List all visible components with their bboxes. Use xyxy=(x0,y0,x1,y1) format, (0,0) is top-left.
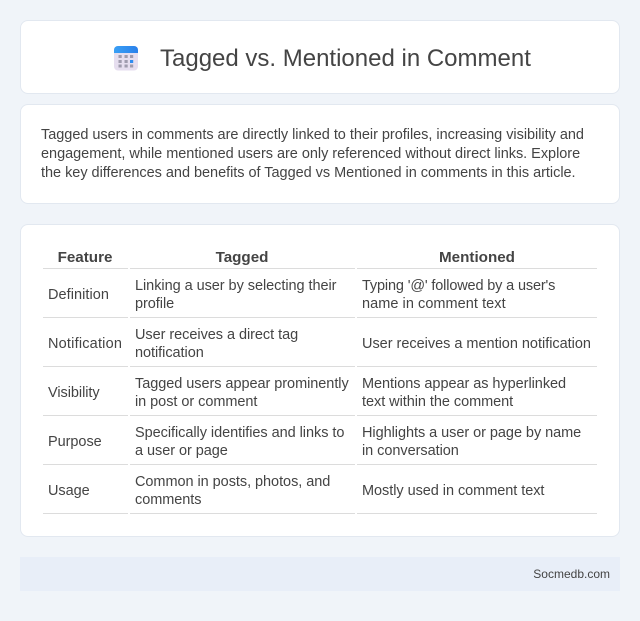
row: notification: notification xyxy=(135,345,204,361)
row: notification: User receives a mention notification xyxy=(362,336,591,352)
row: notification: User receives a direct tag xyxy=(135,327,298,343)
intro text: the key differences and benefits of Tagged vs Mentioned in comments in this article. xyxy=(41,165,576,181)
row: usage: Common in posts, photos, and xyxy=(135,474,330,490)
row: visibility xyxy=(48,376,566,410)
footer bar xyxy=(20,557,620,591)
row: purpose: Specifically identifies and links to xyxy=(135,425,344,441)
row: notification: Notification xyxy=(48,336,122,352)
row: visibility: Mentions appear as hyperlinked xyxy=(362,376,566,392)
table header: Feature xyxy=(58,249,112,266)
footer text: Socmedb.com xyxy=(533,567,610,581)
intro card xyxy=(20,104,620,204)
table card xyxy=(20,224,620,537)
row: definition xyxy=(48,278,555,312)
row: usage xyxy=(48,474,544,508)
row: notification xyxy=(48,327,591,361)
row: definition: Typing '@' followed by a user's xyxy=(362,278,555,294)
intro text: engagement, while mentioned users are only referenced without direct links. Explore xyxy=(41,146,580,162)
intro text: Tagged users in comments are directly linked to their profiles, increasing visibility and xyxy=(41,127,584,143)
row: visibility: text within the comment xyxy=(362,394,513,410)
row: definition: name in comment text xyxy=(362,296,506,312)
row: definition: Definition xyxy=(48,287,109,303)
row: visibility: in post or comment xyxy=(135,394,257,410)
table header: Mentioned xyxy=(439,249,515,266)
row: purpose: a user or page xyxy=(135,443,228,459)
row: usage: comments xyxy=(135,492,201,508)
title card xyxy=(20,20,620,94)
table header xyxy=(58,249,515,266)
title: Tagged vs. Mentioned in Comment xyxy=(160,45,531,72)
icon: calendar xyxy=(114,46,138,70)
row: definition: profile xyxy=(135,296,174,312)
row: usage: Mostly used in comment text xyxy=(362,483,544,499)
row: definition: Linking a user by selecting their xyxy=(135,278,336,294)
row: purpose xyxy=(48,425,581,459)
row: visibility: Visibility xyxy=(48,385,100,401)
row: purpose: in conversation xyxy=(362,443,459,459)
row: purpose: Highlights a user or page by name xyxy=(362,425,581,441)
table header: Tagged xyxy=(216,249,268,266)
intro text xyxy=(41,127,584,181)
row: purpose: Purpose xyxy=(48,434,102,450)
row: visibility: Tagged users appear prominently xyxy=(135,376,349,392)
row: usage: Usage xyxy=(48,483,90,499)
